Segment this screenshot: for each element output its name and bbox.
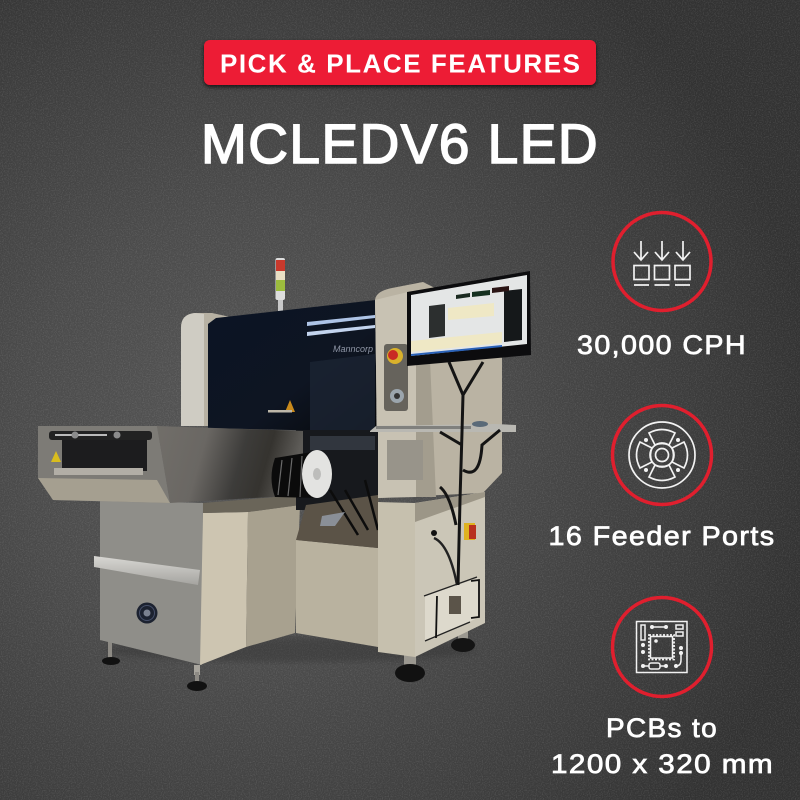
icon: circuit board bbox=[612, 598, 712, 696]
label: PCBs to bbox=[606, 713, 718, 743]
cooling fan bbox=[136, 602, 158, 624]
icon: feeder wheel bbox=[612, 406, 712, 504]
emergency stop panel bbox=[384, 344, 408, 411]
label: 1200 x 320 mm bbox=[551, 749, 774, 779]
floor shadow bbox=[105, 638, 475, 662]
lower right column bbox=[378, 492, 485, 657]
enclosure and window: Manncorp bbox=[333, 344, 373, 354]
keyboard shelf bbox=[370, 421, 516, 432]
title: MCLEDV6 LED bbox=[201, 112, 599, 175]
machine photo bbox=[38, 258, 531, 691]
feature: 16 feeder ports bbox=[548, 406, 776, 551]
internal mechanism and cables bbox=[296, 430, 378, 548]
right column bbox=[375, 282, 502, 498]
monitor bbox=[407, 271, 531, 366]
component reel bbox=[272, 450, 332, 498]
cable loom bbox=[440, 362, 500, 585]
badge: pick and place features bbox=[204, 40, 596, 85]
label: 30,000 CPH bbox=[577, 330, 747, 360]
label bbox=[551, 713, 774, 779]
tower light bbox=[276, 258, 285, 313]
icon: arrows into component slots bbox=[613, 212, 711, 310]
enclosure and window bbox=[181, 300, 376, 432]
handle bar bbox=[94, 556, 200, 585]
feature: 30,000 CPH bbox=[577, 212, 747, 360]
machine feet bbox=[102, 630, 475, 691]
left feeder box bbox=[38, 426, 303, 503]
power supply rack bbox=[424, 577, 479, 641]
lower left base bbox=[94, 490, 380, 665]
label: 16 Feeder Ports bbox=[548, 521, 776, 551]
feature: PCB size bbox=[551, 598, 774, 779]
badge: pick and place features: PICK & PLACE FEATURES bbox=[220, 48, 580, 78]
red isolator switch bbox=[464, 523, 476, 540]
